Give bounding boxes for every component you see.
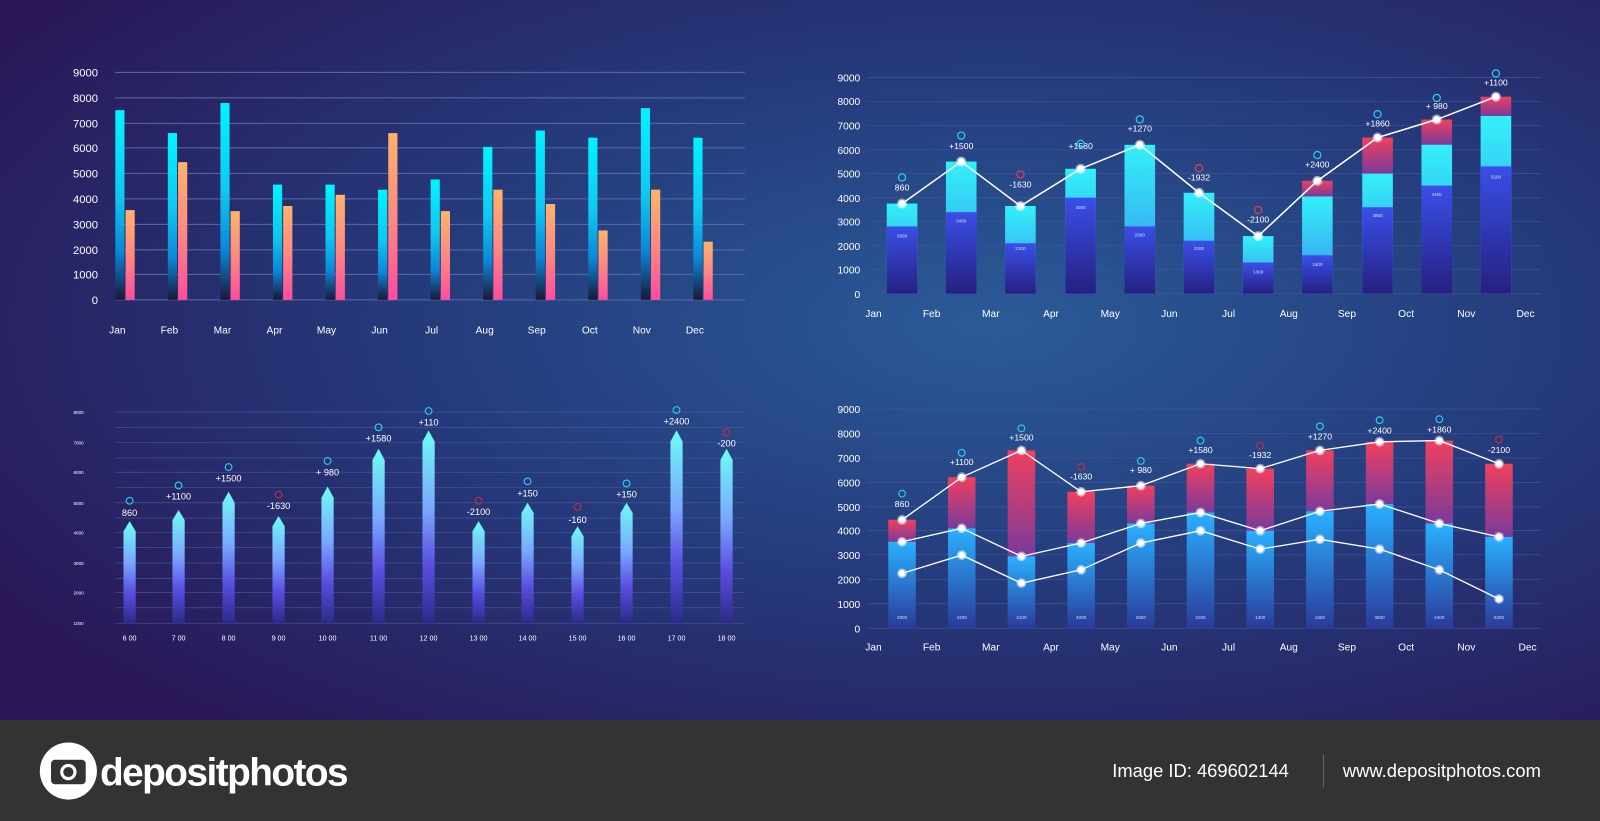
panel: stacked bars with line: 5000 — [838, 169, 861, 180]
panel: arrow bars by hour: 15 00 — [569, 634, 586, 642]
panel: stacked bars with line: +1580 — [1068, 141, 1093, 151]
panel: stacked bars with three lines: May — [1101, 643, 1121, 654]
panel: stacked bars with three lines: 4000 — [838, 526, 861, 537]
panel: stacked bars with line: +1270 — [1128, 124, 1152, 134]
panel: arrow bars by hour: +150 — [517, 489, 538, 499]
panel: stacked bars with line: 9000 — [838, 74, 861, 85]
panel: stacked bars with line: 0 — [855, 290, 861, 301]
logo text: depositphotos — [100, 751, 347, 794]
panel: grouped bar chart: Dec — [686, 326, 704, 336]
panel: grouped bar chart: 4000 — [73, 194, 98, 206]
panel: stacked bars with line: 2200 — [1194, 246, 1205, 251]
panel: arrow bars by hour: -160 — [568, 515, 587, 525]
panel: stacked bars with line: +1860 — [1365, 118, 1390, 128]
panel: arrow bars by hour: 7000 — [73, 441, 84, 446]
panel: stacked bars with three lines: 3800 — [1374, 615, 1385, 620]
panel: arrow bars by hour: 5000 — [73, 501, 84, 506]
panel: stacked bars with three lines: + 980 — [1130, 465, 1152, 475]
panel: stacked bars with line: 4400 — [1432, 192, 1442, 197]
panel: arrow bars by hour: 10 00 — [319, 634, 336, 642]
panel: stacked bars with three lines: 1000 — [838, 600, 861, 611]
panel: grouped bar chart: May — [317, 326, 337, 336]
panel: grouped bar chart: 9000 — [73, 67, 98, 79]
panel: stacked bars with three lines: Feb — [923, 643, 941, 654]
panel: arrow bars by hour: 860 — [122, 508, 137, 518]
panel: stacked bars with three lines: -1932 — [1249, 450, 1271, 460]
panel: stacked bars with three lines: 5200 — [1494, 615, 1505, 620]
panel: stacked bars with line: 8000 — [838, 97, 861, 108]
panel: stacked bars with three lines: 8000 — [838, 430, 861, 441]
panel: stacked bars with line: -1932 — [1188, 173, 1210, 183]
panel: grouped bar chart: 8000 — [73, 93, 98, 105]
panel: grouped bar chart: Sep — [528, 326, 546, 336]
panel: grouped bar chart: Jan — [109, 326, 126, 336]
panel: stacked bars with three lines: +1580 — [1188, 445, 1213, 455]
panel: arrow bars by hour: -1630 — [267, 501, 290, 511]
panel: stacked bars with three lines: 0 — [855, 624, 861, 635]
panel: stacked bars with three lines — [838, 405, 1541, 654]
panel: stacked bars with three lines: Jan — [865, 643, 882, 654]
panel: stacked bars with three lines: 4400 — [1434, 615, 1445, 620]
panel: stacked bars with line: Jan — [865, 309, 882, 320]
panel: stacked bars with line: 1600 — [1312, 262, 1323, 267]
panel: stacked bars with three lines: Jun — [1161, 643, 1178, 654]
panel: stacked bars with line: 1300 — [1253, 269, 1264, 274]
panel: stacked bars with line: +1100 — [1484, 78, 1508, 88]
panel: arrow bars by hour — [73, 407, 745, 642]
panel: stacked bars with line: 5200 — [1491, 174, 1501, 179]
panel: arrow bars by hour: 9 00 — [272, 634, 286, 642]
panel: stacked bars with three lines: +1100 — [950, 457, 974, 467]
panel: arrow bars by hour: +1500 — [216, 473, 241, 483]
panel: stacked bars with three lines: Nov — [1457, 643, 1476, 654]
panel: stacked bars with line: Jun — [1161, 309, 1178, 320]
panel: stacked bars with three lines: 2000 — [838, 575, 861, 586]
panel: stacked bars with line: 2800 — [1135, 233, 1145, 238]
panel: grouped bar chart: Apr — [267, 326, 283, 336]
panel: grouped bar chart: Aug — [476, 326, 494, 336]
panel: stacked bars with line: Dec — [1516, 309, 1535, 320]
panel: arrow bars by hour: 3000 — [73, 561, 84, 566]
panel: grouped bar chart: 1000 — [73, 269, 98, 281]
panel: arrow bars by hour: 6 00 — [123, 634, 137, 642]
panel: grouped bar chart: 3000 — [73, 219, 98, 231]
panel: stacked bars with line: 1000 — [838, 265, 861, 276]
panel: grouped bar chart: Jul — [425, 326, 438, 336]
panel: stacked bars with line — [838, 70, 1541, 320]
panel: arrow bars by hour: + 980 — [316, 467, 339, 477]
panel: arrow bars by hour: -2100 — [467, 507, 490, 517]
panel: arrow bars by hour: 13 00 — [470, 634, 488, 642]
panel: arrow bars by hour: 8 00 — [222, 634, 236, 642]
panel: stacked bars with three lines: 2800 — [1136, 615, 1146, 620]
panel: grouped bar chart: Nov — [633, 326, 652, 336]
panel: arrow bars by hour: 12 00 — [420, 634, 438, 642]
panel: stacked bars with three lines: Dec — [1518, 643, 1537, 654]
panel: stacked bars with three lines: +1270 — [1308, 432, 1332, 442]
icon: camera logo — [40, 742, 97, 800]
panel: stacked bars with three lines: -1630 — [1070, 471, 1092, 481]
panel: grouped bar chart: Feb — [161, 326, 178, 336]
panel: arrow bars by hour: +2400 — [664, 416, 689, 426]
panel: stacked bars with line: 860 — [895, 183, 909, 193]
panel: stacked bars with three lines: 2100 — [1016, 615, 1027, 620]
panel: stacked bars with line: Nov — [1457, 309, 1476, 320]
panel: arrow bars by hour: 8000 — [73, 410, 84, 415]
panel: stacked bars with three lines: +2400 — [1367, 425, 1392, 435]
panel: arrow bars by hour: 6000 — [73, 470, 84, 475]
panel: stacked bars with three lines: Apr — [1043, 643, 1060, 654]
panel: arrow bars by hour: 7 00 — [172, 634, 186, 642]
panel: arrow bars by hour: 14 00 — [519, 634, 536, 642]
panel: stacked bars with line: Feb — [923, 309, 941, 320]
panel: stacked bars with three lines: Jul — [1222, 643, 1235, 654]
panel: stacked bars with three lines: +1500 — [1009, 433, 1034, 443]
panel: stacked bars with line: 4000 — [838, 194, 861, 205]
panel: stacked bars with line: 3800 — [1372, 213, 1383, 218]
panel: grouped bar chart: Mar — [214, 326, 232, 336]
panel: stacked bars with three lines: Mar — [982, 643, 1000, 654]
panel: grouped bar chart: Oct — [582, 326, 598, 336]
panel: grouped bar chart — [73, 67, 745, 336]
panel: stacked bars with line: Jul — [1222, 309, 1235, 320]
panel: stacked bars with three lines: -2100 — [1488, 445, 1510, 455]
panel: stacked bars with three lines: Sep — [1338, 643, 1356, 654]
panel: arrow bars by hour: 4000 — [73, 530, 84, 535]
panel: stacked bars with line: 4000 — [1076, 205, 1086, 210]
panel: stacked bars with line: May — [1101, 309, 1121, 320]
panel: stacked bars with three lines: 9000 — [838, 405, 861, 416]
panel: stacked bars with line: 3400 — [956, 218, 967, 223]
footer — [0, 720, 1600, 821]
panel: stacked bars with line: + 980 — [1426, 101, 1448, 111]
panel: arrow bars by hour: 16 00 — [618, 634, 635, 642]
panel: stacked bars with line: Oct — [1398, 309, 1414, 320]
panel: stacked bars with three lines: 1300 — [1255, 615, 1266, 620]
panel: arrow bars by hour: +1580 — [366, 434, 391, 444]
panel: arrow bars by hour: 18 00 — [718, 634, 735, 642]
panel: stacked bars with three lines: 4000 — [1076, 615, 1087, 620]
panel: stacked bars with three lines: 7000 — [838, 454, 861, 465]
panel: stacked bars with three lines: 2200 — [1195, 615, 1206, 620]
image id: Image ID: 469602144 — [1112, 760, 1289, 781]
panel: grouped bar chart: 7000 — [73, 118, 98, 130]
panel: arrow bars by hour: 11 00 — [370, 634, 387, 642]
panel: stacked bars with line: -2100 — [1247, 214, 1269, 224]
panel: stacked bars with line: 2000 — [838, 242, 861, 253]
panel: stacked bars with three lines: 3000 — [838, 551, 861, 562]
panel: stacked bars with three lines: Aug — [1280, 643, 1298, 654]
panel: stacked bars with three lines: 1600 — [1315, 615, 1325, 620]
panel: stacked bars with three lines: 860 — [895, 499, 909, 509]
panel: stacked bars with three lines: +1860 — [1427, 424, 1452, 434]
panel: stacked bars with three lines: 2800 — [897, 615, 908, 620]
panel: arrow bars by hour: 1000 — [73, 621, 84, 626]
panel: arrow bars by hour: -200 — [717, 439, 736, 449]
panel: stacked bars with line: Apr — [1043, 309, 1060, 320]
panel: stacked bars with three lines: 3400 — [957, 615, 967, 620]
panel: stacked bars with line: +1500 — [949, 141, 974, 151]
website: www.depositphotos.com — [1342, 760, 1541, 781]
panel: stacked bars with three lines: Oct — [1398, 643, 1414, 654]
panel: stacked bars with line: 3000 — [838, 217, 861, 228]
panel: arrow bars by hour: +150 — [616, 490, 637, 500]
panel: stacked bars with line: 2100 — [1015, 246, 1026, 251]
panel: stacked bars with line: 6000 — [838, 146, 861, 157]
panel: stacked bars with three lines: 6000 — [838, 478, 861, 489]
panel: stacked bars with line: +2400 — [1305, 159, 1330, 169]
panel: grouped bar chart: 0 — [92, 295, 98, 307]
panel: grouped bar chart: 2000 — [73, 245, 98, 257]
panel: grouped bar chart: Jun — [371, 326, 388, 336]
panel: stacked bars with line: 2800 — [897, 234, 908, 239]
panel: arrow bars by hour: +110 — [419, 417, 439, 427]
panel: stacked bars with line: Mar — [982, 309, 1000, 320]
panel: stacked bars with line: Aug — [1280, 309, 1298, 320]
panel: stacked bars with line: 7000 — [838, 122, 861, 133]
panel: arrow bars by hour: 2000 — [73, 591, 84, 596]
panel: grouped bar chart: 5000 — [73, 168, 98, 180]
panel: stacked bars with line: -1630 — [1009, 180, 1032, 190]
panel: stacked bars with three lines: 5000 — [838, 503, 861, 514]
panel: grouped bar chart: 6000 — [73, 143, 98, 155]
panel: arrow bars by hour: +1100 — [166, 492, 191, 502]
panel: stacked bars with line: Sep — [1338, 309, 1356, 320]
panel: arrow bars by hour: 17 00 — [668, 634, 685, 642]
